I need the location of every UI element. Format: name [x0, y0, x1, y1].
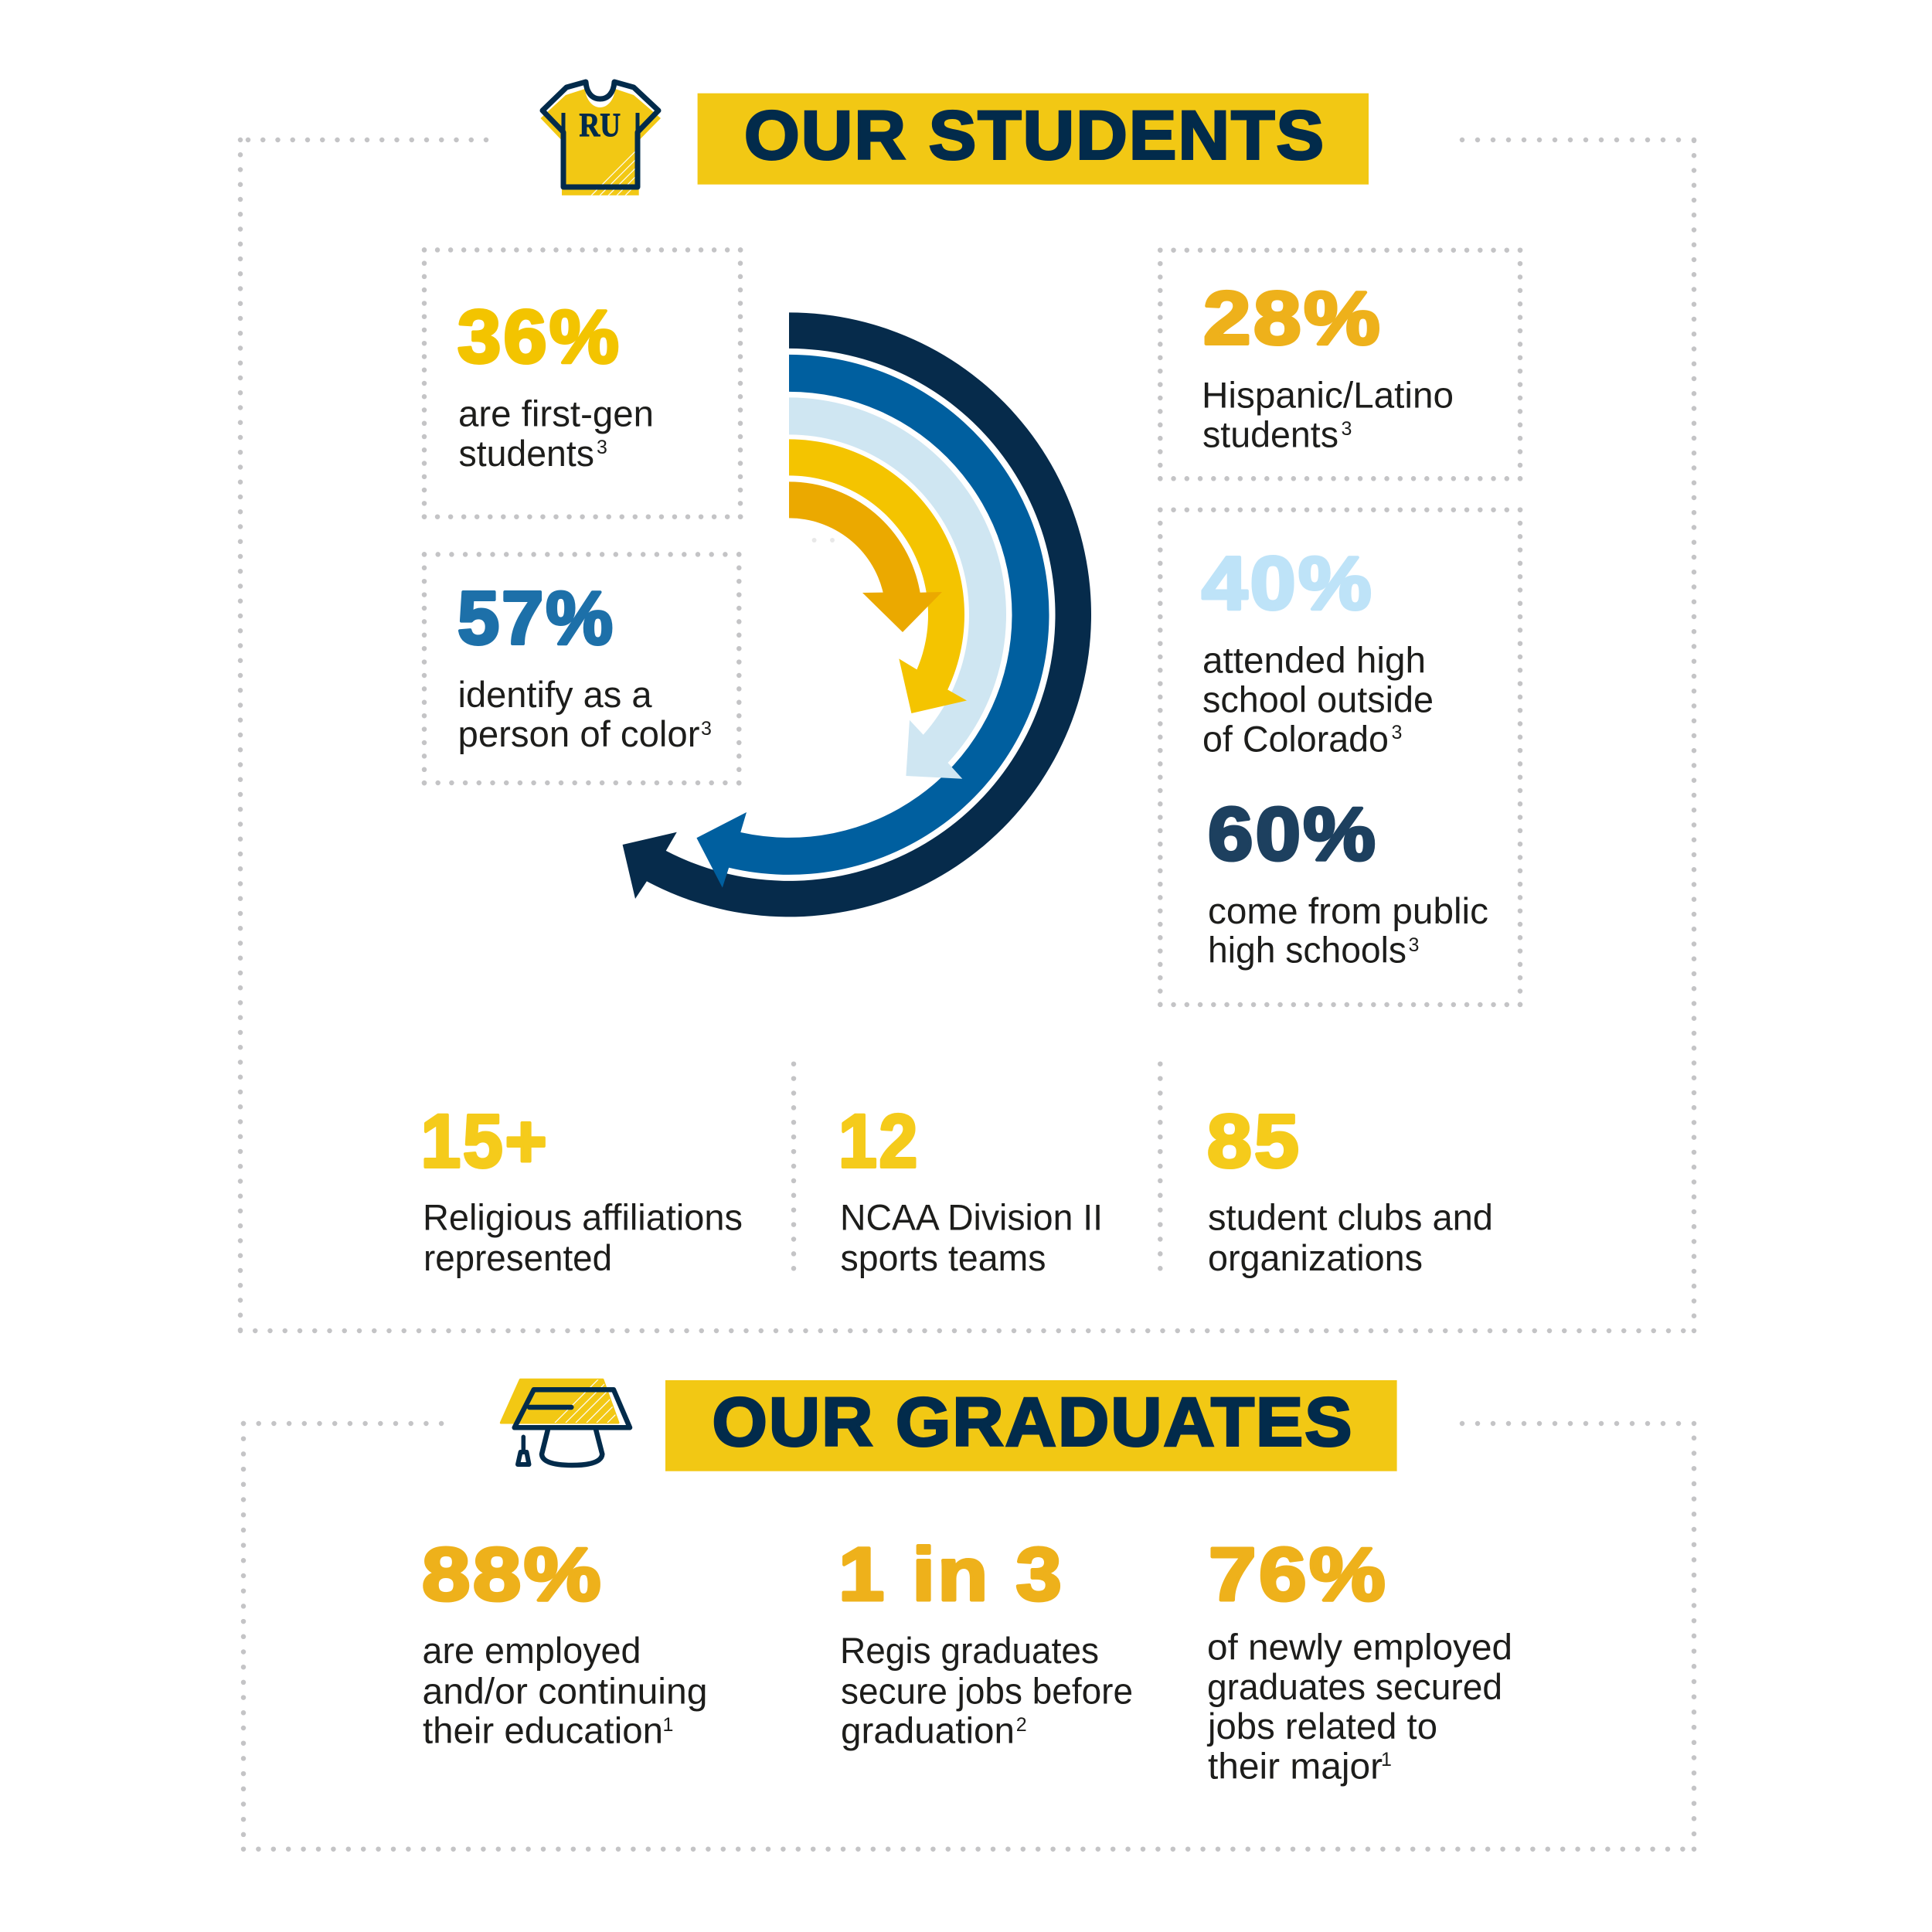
stat: one in three: Regis graduates — [840, 1630, 1099, 1671]
stat: jobs related to major: graduates secured — [1207, 1666, 1502, 1707]
chart: concentric percentage arrows — [623, 312, 1091, 917]
arrow: 57 percent blue — [696, 355, 1049, 888]
arrow: 28 percent orange — [789, 481, 942, 632]
arrow: 40 percent light blue — [789, 397, 1006, 779]
stat: sports teams — [838, 1099, 1103, 1278]
stat box: person of color: identify as a — [457, 674, 652, 715]
stat box: person of color: 57% — [457, 576, 615, 660]
stat box: out of state and public schools: of Colorado — [1202, 719, 1389, 760]
divider dots — [1158, 1064, 1163, 1271]
stat box: out of state and public schools: high schools — [1208, 930, 1406, 971]
stat: employed or continuing — [422, 1532, 708, 1751]
stat: employed or continuing: and/or continuing — [422, 1671, 708, 1711]
stat box: out of state and public schools: 60% — [1208, 791, 1378, 876]
stat box: first-gen students: students — [459, 433, 594, 474]
stat: student clubs: organizations — [1208, 1237, 1423, 1278]
heading: our graduates: OUR GRADUATES — [713, 1383, 1354, 1460]
stat: sports teams: 12 — [838, 1099, 920, 1183]
stat box: out of state and public schools: 3 — [1391, 722, 1402, 743]
stat box: hispanic latino — [1160, 250, 1520, 479]
stat box: hispanic latino: 3 — [1342, 418, 1352, 440]
icon: t-shirt — [541, 82, 661, 199]
stat box: out of state and public schools: 3 — [1408, 934, 1419, 956]
icon: graduation cap — [499, 1379, 632, 1468]
stat: jobs related to major: jobs related to — [1206, 1706, 1437, 1747]
panel: our students frame — [240, 140, 1694, 1331]
stat: one in three: graduation — [841, 1709, 1015, 1751]
stat box: first-gen students — [424, 250, 740, 517]
stat box: first-gen students: 3 — [597, 437, 607, 458]
stat box: out of state and public schools — [1160, 510, 1520, 1005]
stat: employed or continuing: 88% — [422, 1532, 604, 1617]
stat: one in three: secure jobs before — [841, 1671, 1133, 1711]
stat: employed or continuing: 1 — [663, 1714, 673, 1736]
stat box: out of state and public schools: school outside — [1202, 679, 1434, 719]
stat box: first-gen students: 36% — [457, 294, 621, 379]
stat box: person of color: person of color — [457, 713, 700, 754]
stat: employed or continuing: their education — [423, 1709, 663, 1751]
stat box: person of color: 3 — [701, 718, 712, 740]
stat: employed or continuing: are employed — [422, 1630, 641, 1671]
stat: one in three — [838, 1532, 1133, 1751]
arrow: 60 percent navy — [623, 312, 1091, 917]
stat box: hispanic latino: 28% — [1203, 276, 1383, 360]
stat: student clubs: 85 — [1207, 1099, 1301, 1183]
stat: jobs related to major — [1206, 1532, 1512, 1787]
arrow: 36 percent yellow — [789, 439, 967, 713]
stat: sports teams: sports teams — [841, 1237, 1046, 1278]
stat: one in three: 1 in 3 — [838, 1532, 1064, 1617]
stat: jobs related to major: their major — [1208, 1746, 1383, 1787]
stat: jobs related to major: 76% — [1209, 1532, 1388, 1617]
stat: religious affiliations: 15+ — [420, 1099, 549, 1183]
stat: jobs related to major: of newly employed — [1207, 1626, 1512, 1667]
stat box: first-gen students: are first-gen — [458, 393, 654, 434]
stat: jobs related to major: 1 — [1381, 1749, 1392, 1770]
stat: sports teams: NCAA Division II — [840, 1197, 1103, 1238]
stat: one in three: 2 — [1016, 1714, 1027, 1736]
stat: student clubs: student clubs and — [1208, 1197, 1493, 1238]
panel: our graduates frame — [243, 1423, 1694, 1849]
stat: student clubs — [1207, 1099, 1493, 1278]
stat: religious affiliations: Religious affiliations — [423, 1197, 743, 1238]
stat box: out of state and public schools: come from public — [1208, 890, 1488, 931]
stat: religious affiliations — [420, 1099, 743, 1278]
stat box: hispanic latino: students — [1202, 414, 1338, 455]
stat box: hispanic latino: Hispanic/Latino — [1202, 374, 1454, 415]
stat box: out of state and public schools: attended high — [1202, 640, 1426, 681]
icon: t-shirt: RU — [580, 107, 621, 144]
divider dots — [791, 1064, 796, 1271]
stat box: out of state and public schools: 40% — [1202, 541, 1374, 625]
stat box: person of color — [424, 554, 739, 783]
stat: religious affiliations: represented — [423, 1237, 612, 1278]
heading: our students: OUR STUDENTS — [744, 96, 1325, 173]
